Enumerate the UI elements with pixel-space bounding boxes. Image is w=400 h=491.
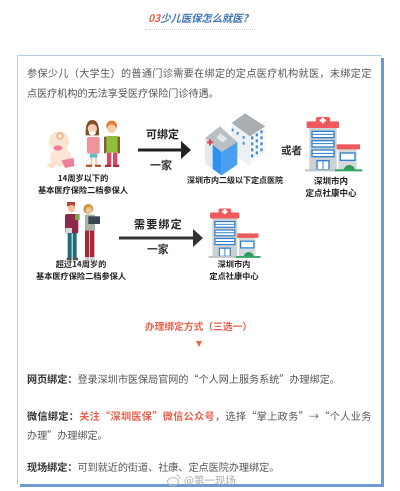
icon: community health center [208, 208, 261, 258]
text: wechat binding: 办理”办理绑定。 [27, 427, 108, 442]
text: wechat binding [27, 408, 372, 442]
intro text [27, 65, 372, 100]
text: web binding: 网页绑定：登录深圳市医保局官网的“个人网上服务系统”办理绑定。 [27, 371, 340, 386]
label: community center: 定点社康中心 [209, 270, 259, 282]
icon: two adults [65, 202, 100, 260]
icon: hospital building [205, 114, 266, 176]
label: secondary hospital: 深圳市内二级以下定点医院 [187, 175, 283, 186]
icon: baby [46, 132, 75, 168]
icon: community health center [305, 117, 362, 172]
label: or: 或者 [281, 143, 302, 158]
text: on-site binding: 现场绑定：可到就近的街道、社康、定点医院办理绑定。 [27, 459, 279, 474]
label: over 14 [36, 258, 126, 282]
label: community center: 深圳市内 [218, 258, 250, 270]
label: one: 一家 [150, 157, 172, 173]
intro text: 参保少儿（大学生）的普通门诊需要在绑定的定点医疗机构就医，未绑定定 [27, 65, 372, 80]
label: under 14 [38, 172, 128, 196]
label: must bind: 需要绑定 [134, 216, 183, 232]
watermark: @第一现场 [184, 473, 236, 488]
label: over 14: 基本医疗保险二档参保人 [36, 270, 126, 282]
heading: binding methods: 办理绑定方式（三选一） [145, 319, 252, 333]
panel: main card [17, 55, 381, 484]
title: 03少儿医保怎么就医? [148, 10, 248, 25]
label: community center: 定点社康中心 [305, 186, 356, 198]
label: under 14: 14周岁以下的 [58, 172, 108, 184]
intro text: 点医疗机构的无法享受医疗保险门诊待遇。 [27, 85, 219, 100]
arrow: must bind [119, 229, 203, 247]
label: over 14: 超过14周岁的 [56, 258, 106, 270]
icon: two children [86, 120, 120, 167]
label: community center [209, 258, 259, 282]
label: community center [305, 175, 356, 198]
label: can bind: 可绑定 [146, 126, 179, 142]
label: one: 一家 [147, 241, 169, 257]
label: under 14: 基本医疗保险二档参保人 [38, 184, 128, 196]
text: wechat binding: 微信绑定：关注“深圳医保”微信公众号，选择“掌上政务”→“个人业务 [27, 408, 372, 423]
label: community center: 深圳市内 [314, 175, 348, 187]
icon: down triangle [196, 341, 202, 347]
arrow: can bind [138, 141, 191, 159]
